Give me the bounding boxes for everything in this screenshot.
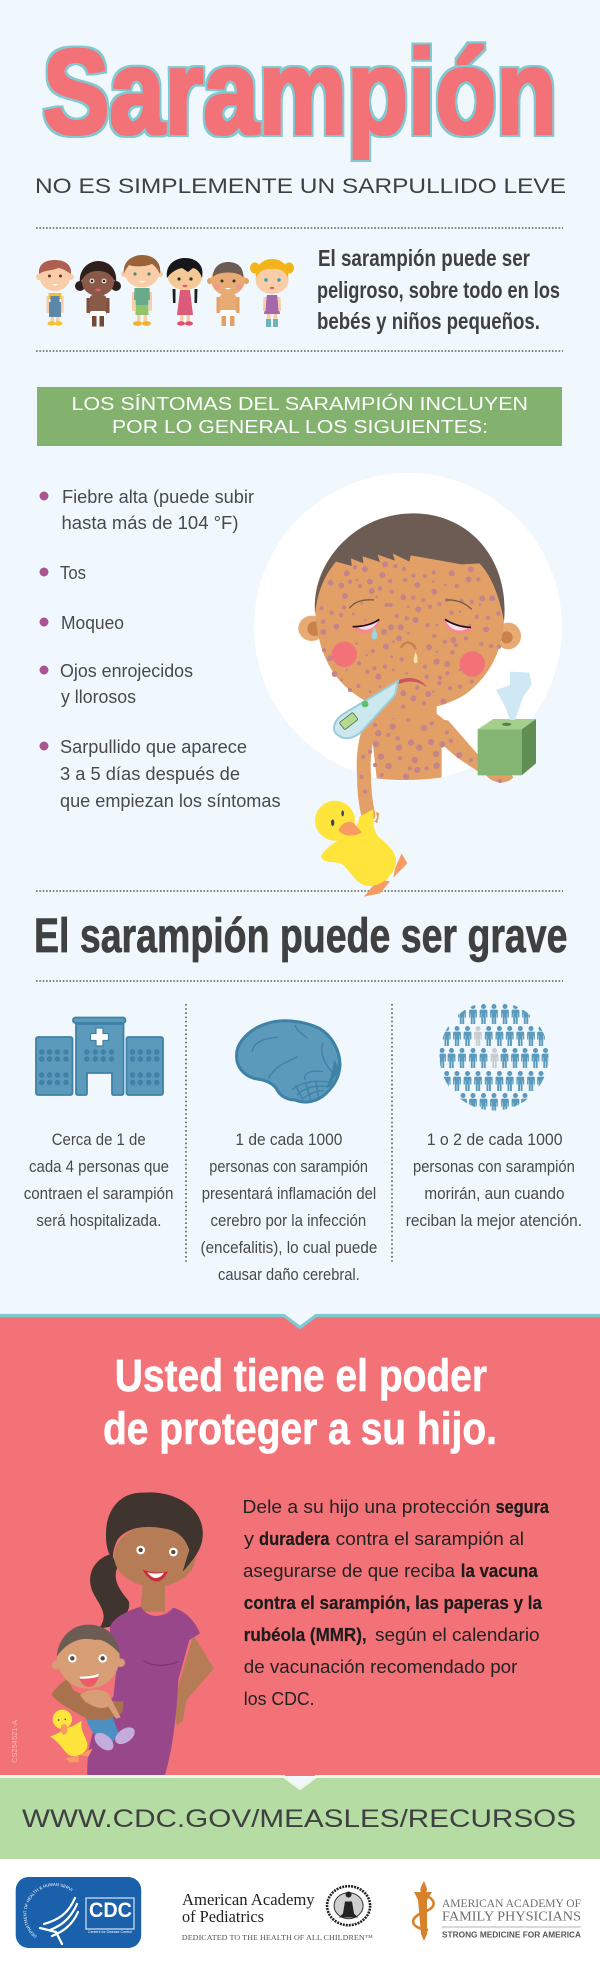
column text: deaths: 1 o 2 de cada 1000 (427, 1130, 563, 1149)
green URL band (0, 1776, 600, 1859)
logo: American Academy of Family Physicians: STRONG MEDICINE FOR AMERICA (442, 1931, 581, 1940)
logo: American Academy of Family Physicians: FAMILY PHYSICIANS (442, 1910, 581, 1925)
mother arm (175, 1635, 214, 1726)
symptom list: Moqueo (61, 613, 124, 633)
logo: American Academy of Pediatrics: American Academy (182, 1890, 315, 1909)
icon: hospital (36, 1018, 163, 1095)
facial rash (323, 564, 492, 701)
tear (371, 627, 377, 639)
vaccination message: Dele a su hijo una protección (242, 1497, 490, 1517)
child 4 (167, 258, 203, 326)
column text: hospitalization: contraen el sarampión (24, 1184, 173, 1203)
body rash (376, 716, 459, 777)
panel heading: Usted tiene el poder (115, 1350, 487, 1401)
logo: American Academy of Family Physicians: AMERICAN ACADEMY OF (442, 1898, 581, 1910)
column text: encephalitis: causar daño cerebral. (218, 1265, 360, 1284)
right arm and hand (437, 718, 513, 783)
symptom list (40, 487, 280, 811)
column text: deaths: personas con sarampión (413, 1157, 575, 1176)
baby pants (86, 1717, 119, 1746)
column text: deaths (406, 1130, 582, 1230)
green banner: symptoms heading: LOS SÍNTOMAS DEL SARAMPIÓN INCLUYEN (72, 393, 528, 414)
face (315, 515, 504, 710)
nose (401, 642, 416, 649)
intro statement: bebés y niños pequeños. (317, 308, 540, 334)
neck (380, 697, 437, 718)
column text: encephalitis: 1 de cada 1000 (235, 1130, 342, 1149)
baby torso and arm (80, 1690, 121, 1719)
panel heading (103, 1350, 497, 1454)
mouth (393, 678, 427, 687)
symptom list: Ojos enrojecidos (60, 661, 193, 681)
mother hair (106, 1492, 203, 1572)
vaccination message: duradera (259, 1529, 330, 1549)
child 3 (121, 255, 163, 326)
baby eyes (68, 1654, 77, 1663)
symptom list: que empiezan los síntomas (60, 791, 280, 811)
symptom list: Fiebre alta (puede subir (62, 487, 254, 507)
tissue (496, 672, 532, 720)
panel: protect your child (0, 1316, 600, 1776)
baby mouth (79, 1673, 99, 1687)
column text: encephalitis: presentará inflamación del (202, 1184, 376, 1203)
eyes (352, 620, 380, 633)
logo: HHS and CDC: CDC (89, 1899, 132, 1922)
white circle behind sick boy (254, 473, 562, 781)
baby head (57, 1627, 120, 1689)
mother face (114, 1525, 196, 1587)
column text: hospitalization (24, 1130, 173, 1230)
baby ears (52, 1661, 60, 1669)
child 5 (207, 262, 249, 326)
column text: deaths: reciban la mejor atención. (406, 1211, 582, 1230)
intro statement: El sarampión puede ser (318, 245, 530, 271)
mother mouth (143, 1569, 168, 1581)
vaccination message: de vacunación recomendado por (244, 1657, 517, 1677)
vaccination message: y (244, 1529, 254, 1549)
ponytail (90, 1554, 129, 1628)
green URL band: WWW.CDC.GOV/MEASLES/RECURSOS (22, 1805, 576, 1833)
logo: American Academy of Pediatrics: of Pediatrics (182, 1907, 264, 1926)
mother holding baby illustration (50, 1492, 214, 1775)
symptom list: hasta más de 104 °F) (62, 513, 238, 533)
column text: encephalitis: (encefalitis), lo cual puede (200, 1238, 377, 1257)
icon: circle of people (438, 1004, 549, 1113)
mother arm holding baby (52, 1679, 123, 1720)
mother eyes (136, 1546, 145, 1554)
column text: hospitalization: será hospitalizada. (36, 1211, 161, 1230)
green banner: symptoms heading (37, 387, 562, 446)
column text: encephalitis: personas con sarampión (209, 1157, 368, 1176)
column text: encephalitis: cerebro por la infección (210, 1211, 366, 1230)
symptom list: Sarpullido que aparece (60, 737, 247, 757)
child 1 (36, 260, 74, 326)
left arm (364, 717, 377, 815)
logo: American Academy of Pediatrics (182, 1886, 373, 1942)
small duck (66, 1748, 93, 1763)
sick boy illustration (298, 513, 536, 897)
vaccination message (242, 1497, 550, 1709)
cheeks (332, 642, 357, 667)
boy head (298, 513, 532, 720)
subtitle: NO ES SIMPLEMENTE UN SARPULLIDO LEVE (35, 175, 566, 198)
footer (0, 1859, 600, 1966)
symptom list: 3 a 5 días después de (60, 764, 240, 784)
rubber duck (393, 853, 407, 878)
torso (372, 709, 448, 780)
baby hair (57, 1625, 119, 1657)
ears (298, 616, 325, 641)
column text: encephalitis (200, 1130, 377, 1284)
symptom list: Tos (60, 563, 86, 583)
baby shoes (91, 1729, 117, 1754)
column text: hospitalization: cada 4 personas que (29, 1157, 169, 1176)
logo: HHS and CDC: Centers for Disease Control (88, 1930, 132, 1934)
intro statement (317, 245, 560, 334)
children illustrations (36, 255, 294, 327)
logo: HHS and CDC (16, 1877, 142, 1948)
boy body, box and duck (315, 709, 536, 897)
logo: American Academy of Family Physicians (413, 1881, 581, 1941)
vaccination message: los CDC. (244, 1689, 315, 1709)
vaccination message: contra el sarampión, las paperas y la (244, 1593, 543, 1613)
green banner: symptoms heading: POR LO GENERAL LOS SIGUIENTES: (112, 417, 488, 437)
dress (87, 1607, 200, 1775)
thermometer (334, 681, 398, 738)
column text: deaths: morirán, aun cuando (424, 1184, 564, 1203)
neck (140, 1580, 165, 1612)
vaccination message: contra el sarampión al (336, 1529, 524, 1549)
child 2 (75, 261, 121, 326)
vaccination message: segura (496, 1497, 550, 1517)
logo: American Academy of Pediatrics: DEDICATED TO THE HEALTH OF ALL CHILDREN™ (182, 1933, 373, 1942)
brows (349, 600, 374, 608)
hair (315, 513, 505, 622)
logo: HHS and CDC: DEPARTMENT OF HEALTH & HUMAN SERVICES-USA (24, 1883, 73, 1938)
column text: hospitalization: Cerca de 1 de (52, 1130, 146, 1149)
vaccination message: rubéola (MMR), (244, 1625, 367, 1645)
icon: brain (237, 1021, 340, 1102)
symptom list: y llorosos (61, 687, 136, 707)
child 6 (250, 259, 294, 327)
vaccination message: según el calendario (375, 1625, 540, 1645)
panel heading: de proteger a su hijo. (103, 1403, 497, 1454)
tissue box (478, 719, 536, 729)
vaccination message: asegurarse de que reciba (243, 1561, 456, 1581)
vaccination message: la vacuna (461, 1561, 539, 1581)
publication code: CS254521-A (12, 1720, 19, 1763)
